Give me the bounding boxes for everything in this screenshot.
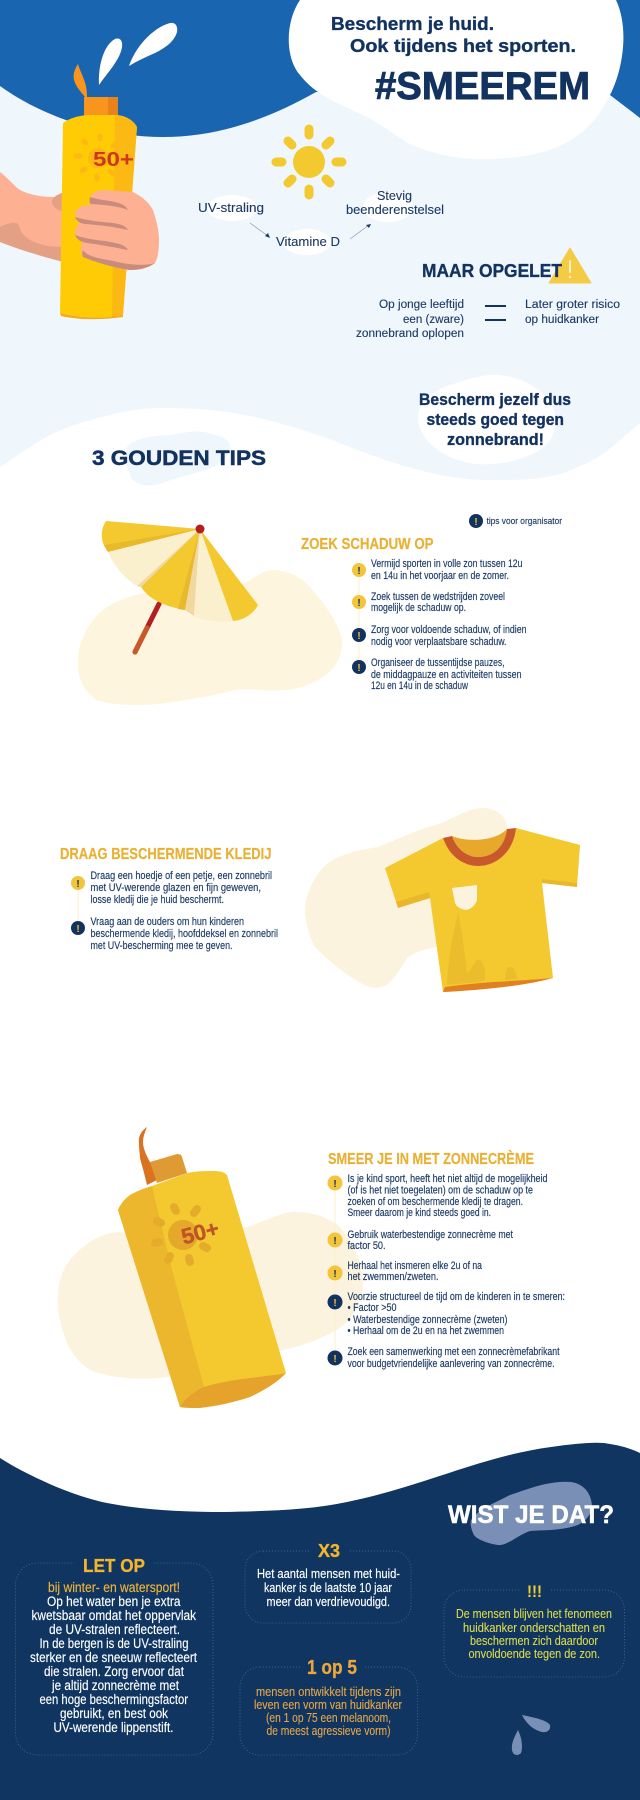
header background [0,0,640,500]
panel: exclamation fact [444,1582,624,1677]
panel: zoek schaduw op: ! [357,631,361,642]
panel: 1 op 5: mensen ontwikkelt tijdens zijn [256,1685,401,1699]
panel: zoek schaduw op: nodig voor verplaatsbare schaduw. [371,636,506,648]
panel: smeer je in met zonnecreme: ! [333,1298,337,1309]
warning heading: MAAR OPGELET [422,261,562,281]
panel: smeer je in met zonnecreme: Smeer daarom je kind steeds goed in. [348,1207,491,1219]
panel: exclamation fact: huidkanker onderschatten en [463,1621,605,1635]
legend: tips for organiser: tips voor organisator [486,516,562,527]
panel: smeer je in met zonnecreme: • Herhaal om de 2u en na het zwemmen [348,1325,504,1337]
panel: let op: kwetsbaar omdat het oppervlak [32,1608,196,1623]
warning heading [422,248,591,283]
panel: zoek schaduw op: Organiseer de tussentijdse pauzes, [371,657,504,669]
panel: draag beschermende kledij: ! [76,924,80,935]
call to action text: zonnebrand! [447,431,544,449]
legend: tips for organiser: ! [474,517,478,528]
icon: white splash drops [99,23,177,85]
panel: smeer je in met zonnecreme: • Factor >50 [348,1302,396,1314]
panel: zoek schaduw op: ! [357,663,361,674]
panel: exclamation fact: beschermen zich daardoor [470,1634,598,1648]
panel: 1 op 5: de meest agressieve vorm) [266,1724,390,1738]
UV and vitamin D diagram: beenderenstelsel [346,202,444,217]
panel: smeer je in met zonnecreme: ! [333,1269,337,1280]
panel: let op: LET OP [83,1556,145,1576]
panel: zoek schaduw op [301,536,526,692]
panel: draag beschermende kledij: DRAAG BESCHERMENDE KLEDIJ [60,846,272,863]
panel: 1 op 5: leven een vorm van huidkanker [254,1698,402,1712]
panel: exclamation fact: De mensen blijven het fenomeen [456,1607,612,1621]
heading: wist je dat [448,1482,614,1545]
panel: exclamation fact: onvoldoende tegen de zon. [468,1647,600,1661]
panel: zoek schaduw op: en 14u in het voorjaar en de zomer. [371,570,509,582]
sunburn risk statement: een (zware) [403,314,464,326]
panel: draag beschermende kledij: Vraag aan de ouders om hun kinderen [90,916,244,928]
heading: wist je dat: WIST JE DAT? [448,1501,614,1529]
sunburn risk statement: Op jonge leeftijd [379,299,464,311]
panel: zoek schaduw op: ! [357,598,361,609]
sunburn risk statement: Later groter risico [525,299,620,311]
call to action text: Bescherm jezelf dus [419,391,571,409]
panel: smeer je in met zonnecreme: factor 50. [348,1240,386,1252]
sunburn risk statement: op huidkanker [525,314,599,326]
panel: let op: je altijd zonnecrème met [51,1678,179,1693]
heading: 3 gouden tips: 3 GOUDEN TIPS [92,447,266,470]
panel: smeer je in met zonnecreme: ! [333,1179,337,1190]
panel: x3 [245,1541,411,1623]
footer navy background [0,1443,640,1800]
panel: x3: kanker is de laatste 10 jaar [264,1581,392,1595]
panel: draag beschermende kledij: losse kledij die je huid beschermt. [90,894,224,906]
panel: smeer je in met zonnecreme: het zwemmen/zweten. [348,1271,438,1283]
panel: let op: gebruikt, en best ook [60,1706,168,1721]
panel: smeer je in met zonnecreme: voor budgetvriendelijke aanlevering van zonnecrème. [348,1358,554,1370]
call to action text: steeds goed tegen [426,411,564,429]
panel: zoek schaduw op: Vermijd sporten in volle zon tussen 12u [371,558,522,570]
illustration: hand holding sunscreen bottle [0,64,159,319]
panel: draag beschermende kledij: met UV-werende glazen en fijn geweven, [90,882,261,894]
panel: smeer je in met zonnecreme: ! [333,1236,337,1247]
UV and vitamin D diagram [198,188,444,255]
panel: x3: Het aantal mensen met huid- [257,1567,400,1581]
title text: Bescherm je huid. [331,14,494,34]
panel: let op [16,1556,213,1755]
panel: smeer je in met zonnecreme: Herhaal het insmeren elke 2u of na [348,1260,482,1272]
panel: smeer je in met zonnecreme: Zoek een samenwerking met een zonnecrèmefabrikant [348,1346,560,1358]
illustration: hand holding sunscreen bottle: 50+ [93,149,134,171]
title text [331,14,576,56]
sunburn risk statement: zonnebrand oplopen [356,328,464,340]
title text: Ook tijdens het sporten. [350,36,576,56]
panel: zoek schaduw op: ! [357,566,361,577]
hashtag heading: #SMEEREM [375,65,590,108]
panel: smeer je in met zonnecreme: ! [333,1354,337,1365]
call to action text [419,391,571,449]
illustration: sunscreen bottle on cream blob [58,1127,363,1408]
panel: smeer je in met zonnecreme: SMEER JE IN MET ZONNECRÈME [328,1151,534,1168]
icon: sun [276,129,342,195]
UV and vitamin D diagram: UV-straling [198,200,264,215]
panel: 1 op 5: (en 1 op 75 een melanoom, [266,1711,391,1725]
panel: zoek schaduw op: mogelijk de schaduw op. [371,602,466,614]
panel: draag beschermende kledij: Draag een hoedje of een petje, een zonnebril [90,870,272,882]
panel: let op: bij winter- en watersport! [48,1580,180,1595]
icon: footer drops [512,1715,550,1755]
illustration: sunscreen bottle on cream blob: 50+ [179,1215,222,1249]
panel: draag beschermende kledij [60,846,278,952]
panel: smeer je in met zonnecreme: zoeken of om beschermende kledij te dragen. [348,1196,523,1208]
panel: exclamation fact: !!! [527,1582,542,1601]
panel: x3: meer dan verdrievoudigd. [266,1595,390,1609]
panel: smeer je in met zonnecreme: Gebruik waterbestendige zonnecrème met [348,1229,513,1241]
panel: smeer je in met zonnecreme: Voorzie structureel de tijd om de kinderen in te smeren: [348,1291,565,1303]
panel: draag beschermende kledij: ! [76,879,80,890]
panel: zoek schaduw op: de middagpauze en activiteiten tussen [371,669,522,681]
panel: draag beschermende kledij: met UV-bescherming mee te geven. [90,940,232,952]
panel: zoek schaduw op: 12u en 14u in de schaduw [371,680,468,692]
panel: smeer je in met zonnecreme: • Waterbestendige zonnecrème (zweten) [348,1314,508,1326]
panel: zoek schaduw op: ZOEK SCHADUW OP [301,536,434,553]
panel: 1 op 5 [240,1657,418,1755]
UV and vitamin D diagram: Vitamine D [276,234,340,249]
panel: smeer je in met zonnecreme: (of is het niet toegelaten) om de schaduw op te [348,1184,533,1196]
panel: let op: In de bergen is de UV-straling [40,1636,188,1651]
panel: x3: X3 [318,1541,340,1561]
panel: draag beschermende kledij: beschermende kledij, hoofddeksel en zonnebril [90,928,278,940]
panel: 1 op 5: 1 op 5 [307,1657,357,1679]
illustration: t-shirt on cream blob [305,808,580,992]
panel: let op: sterker en de sneeuw reflecteert [30,1650,197,1665]
illustration: beach umbrella on cream blob [78,521,342,705]
panel: let op: een hoge beschermingsfactor [40,1692,188,1707]
sunburn risk statement [356,299,620,340]
panel: let op: die stralen. Zorg ervoor dat [44,1664,184,1679]
panel: zoek schaduw op: Zorg voor voldoende schaduw, of indien [371,624,526,636]
panel: let op: Op het water ben je extra [47,1594,181,1609]
legend: tips for organiser [469,514,562,528]
panel: smeer je in met zonnecreme: Is je kind sport, heeft het niet altijd de mogelijkheid [348,1173,548,1185]
UV and vitamin D diagram: Stevig [377,188,412,203]
panel: smeer je in met zonnecreme [328,1151,565,1370]
panel: let op: UV-werende lippenstift. [54,1720,174,1735]
panel: zoek schaduw op: Zoek tussen de wedstrijden zoveel [371,591,505,603]
panel: let op: de UV-stralen reflecteert. [49,1622,180,1637]
